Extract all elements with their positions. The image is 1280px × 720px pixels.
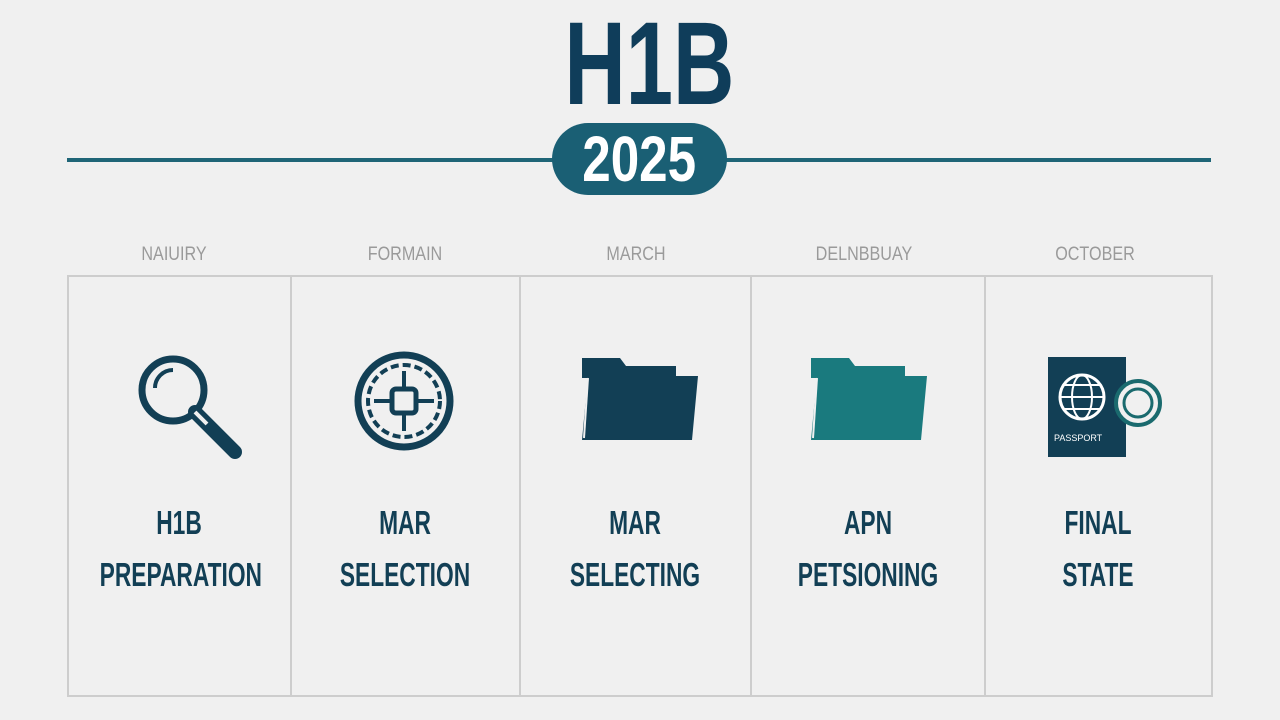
labels — [100, 504, 1134, 593]
labels: SELECTION — [340, 556, 470, 593]
labels: H1B — [156, 504, 202, 541]
labels: PETSIONING — [798, 556, 938, 593]
panel grid — [67, 275, 1213, 697]
month labels: MARCH — [606, 244, 666, 265]
title: H1B — [564, 0, 734, 130]
labels: MAR — [609, 504, 661, 541]
icon: passport — [1048, 357, 1162, 457]
icon: passport: PASSPORT — [1054, 433, 1103, 443]
month labels: NAIUIRY — [141, 244, 207, 265]
month labels: OCTOBER — [1055, 244, 1135, 265]
labels: APN — [844, 504, 892, 541]
labels: FINAL — [1064, 504, 1132, 541]
labels: PREPARATION — [100, 556, 262, 593]
year pill — [552, 123, 727, 195]
icon: dark folder — [582, 358, 698, 440]
labels: SELECTING — [570, 556, 700, 593]
month labels — [141, 244, 1135, 265]
year pill: 2025 — [583, 123, 696, 195]
icon: globe badge — [354, 352, 454, 450]
icon: teal folder — [811, 358, 927, 440]
timeline line — [67, 158, 1211, 162]
month labels: DELNBBUAY — [816, 244, 912, 265]
labels: MAR — [379, 504, 431, 541]
labels: STATE — [1062, 556, 1134, 593]
month labels: FORMAIN — [368, 244, 442, 265]
icon: magnifier — [138, 356, 242, 459]
